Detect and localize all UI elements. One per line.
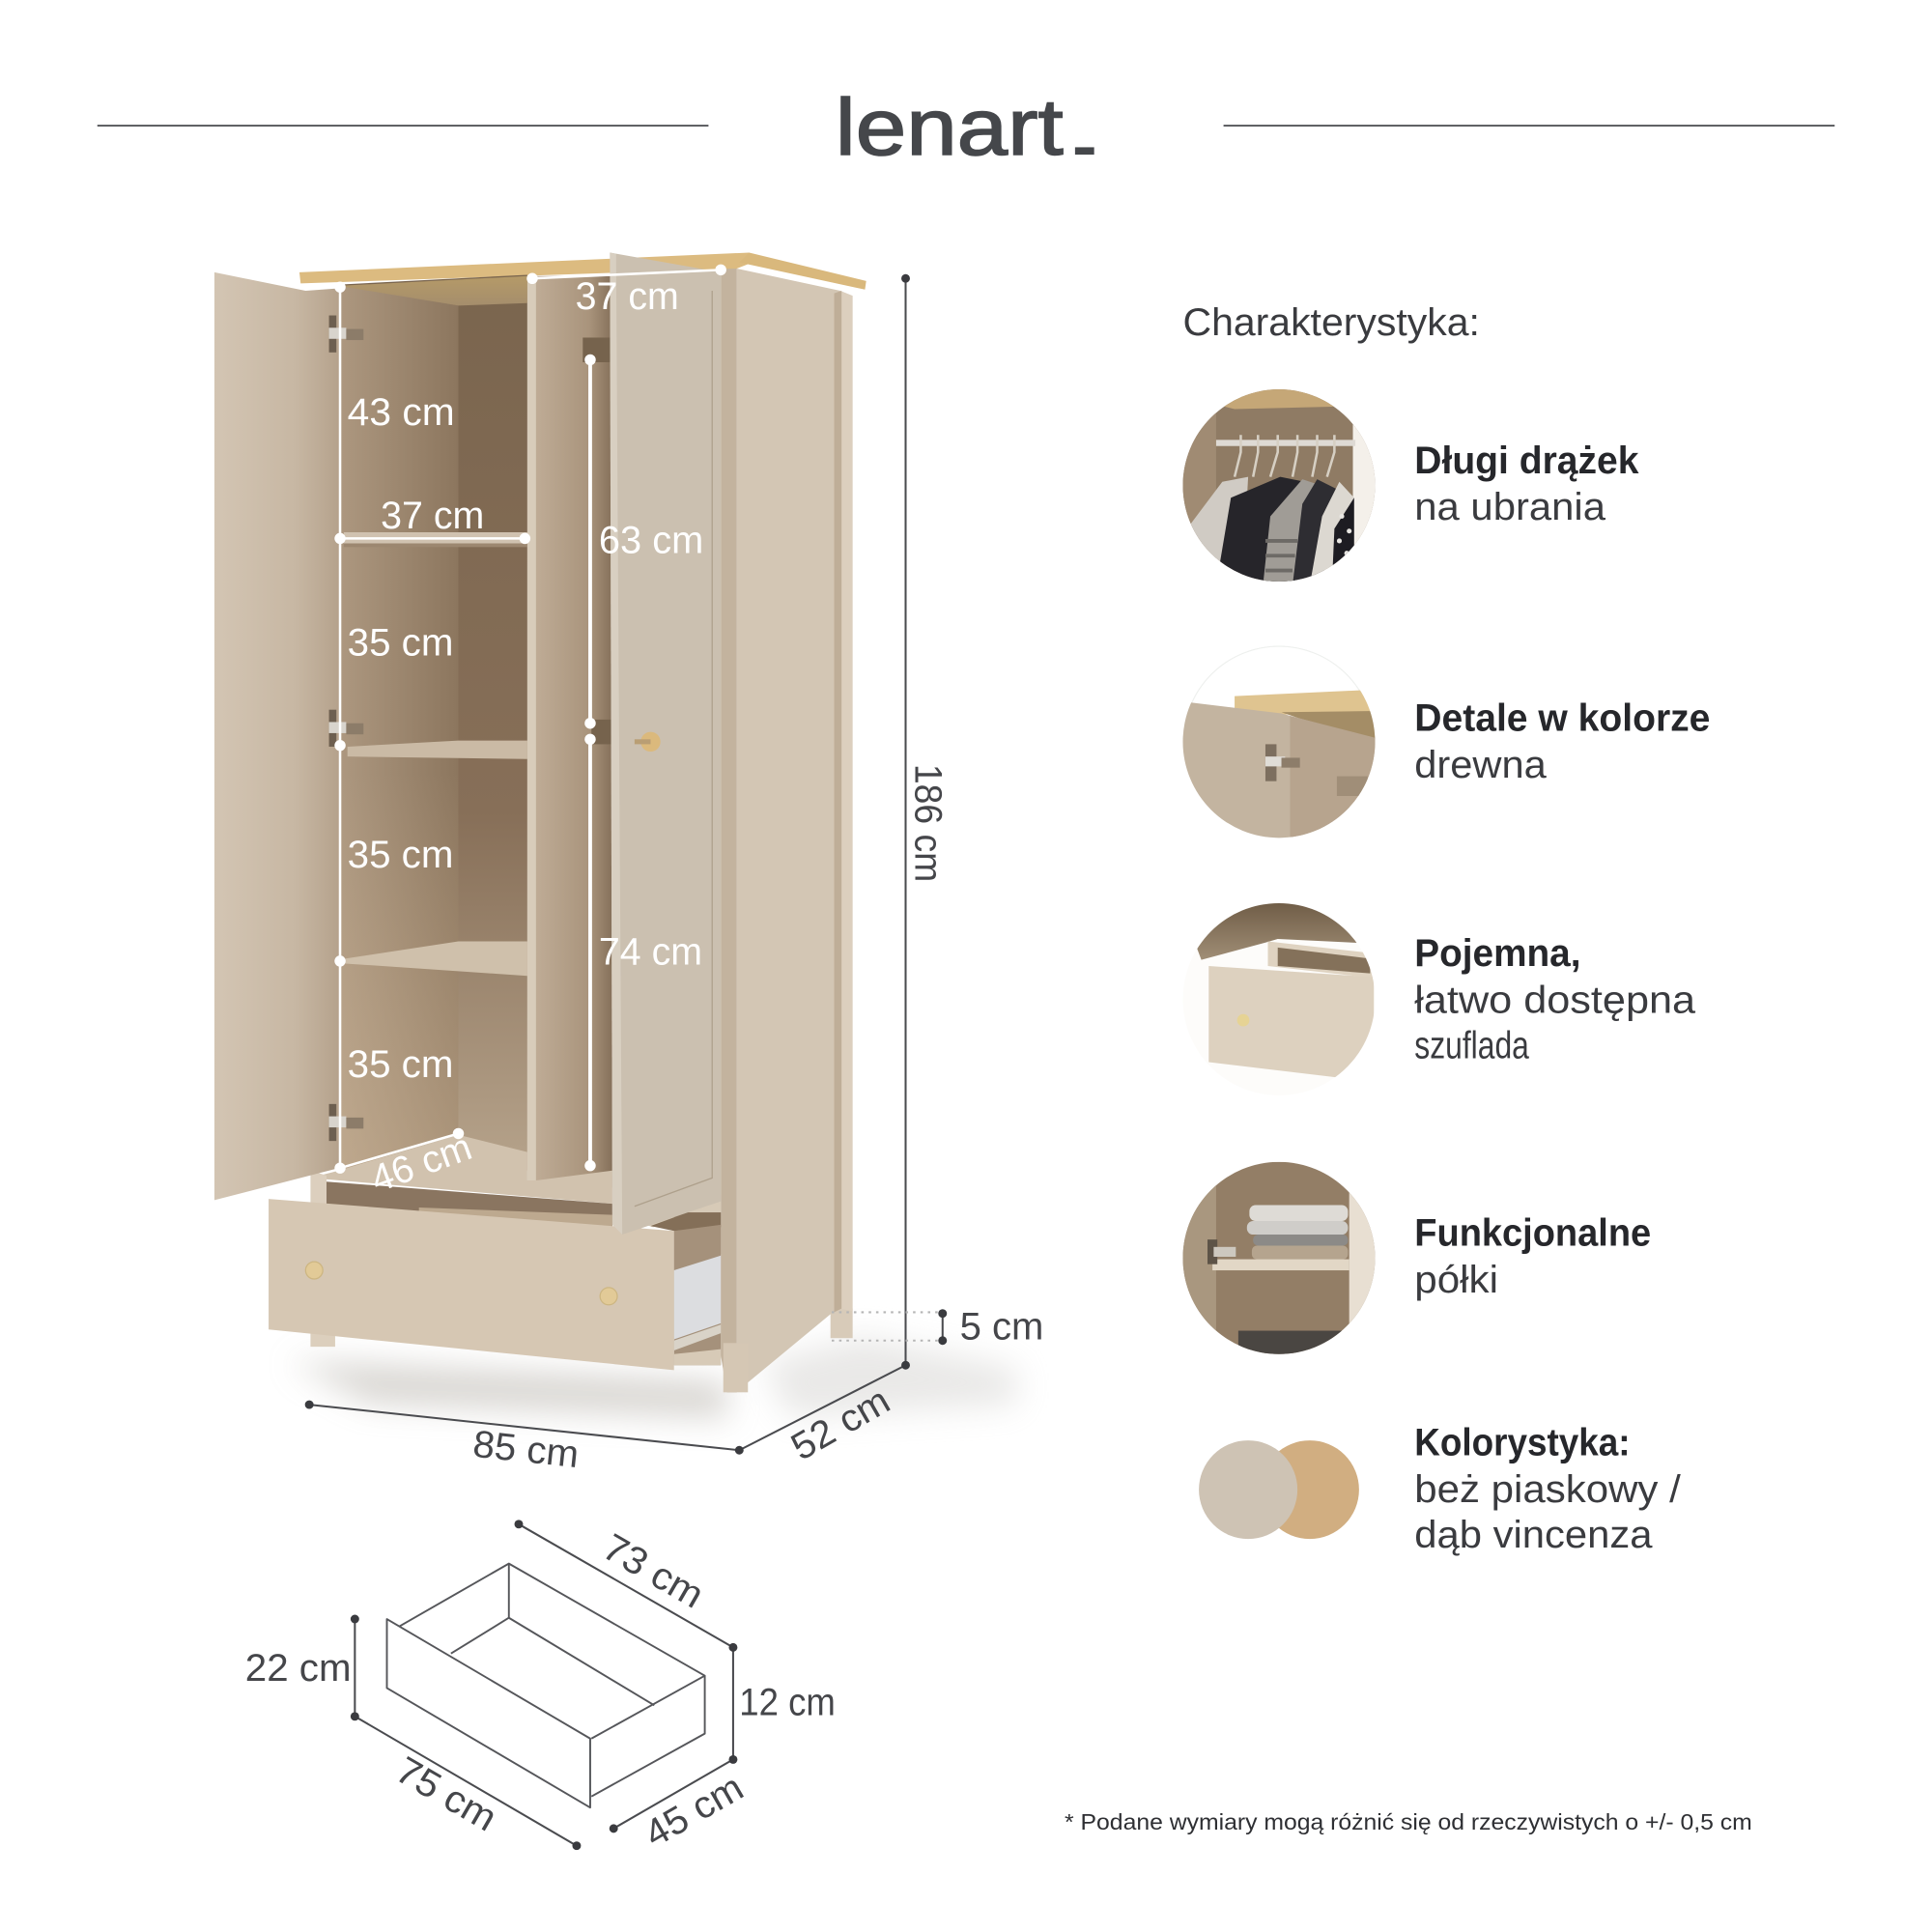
text: Kolorystyka: Kolorystyka: [1414,1421,1630,1463]
text: Długi drążek [1414,440,1639,528]
drawer knobs [305,1262,323,1279]
feature: long rail [1179,388,1639,585]
text: Pojemna: Pojemna, [1414,932,1580,975]
text: Detale w kolorze: drewna [1414,744,1547,786]
outer wardrobe dimensions: 5 cm [960,1305,1043,1348]
drawer diagram: 75 cm [388,1748,504,1839]
side panel and legs [310,269,853,1392]
header with logo [98,82,1834,172]
wardrobe with open doors and drawer [214,252,1016,1417]
text: Długi drążek: Długi drążek [1414,440,1639,482]
icon: clothes on rail [1179,388,1377,585]
divider and right compartment [527,276,612,1188]
door knob [640,732,661,752]
interior white dimensions: 37 cm [576,275,679,318]
text: Pojemna: łatwo dostępna [1414,979,1695,1021]
text: Długi drążek: na ubrania [1414,486,1605,528]
drawer diagram: 12 cm [739,1682,836,1724]
drawer diagram [245,1520,836,1856]
shelves [344,532,527,976]
drawer outline [387,1564,705,1807]
interior white dimensions: 74 cm [599,931,702,974]
oak worktop [299,252,867,290]
outer wardrobe dimensions: 52 cm [784,1379,897,1469]
text: Pojemna: szuflada [1414,1025,1529,1067]
icon: folded clothes on shelf [1179,1162,1378,1359]
interior white dimensions: 63 cm [599,520,703,562]
text: Kolorystyka [1414,1421,1681,1556]
left door [214,272,339,1200]
text: Kolorystyka: beż piaskowy / [1414,1468,1681,1511]
text: Detale w kolorze: Detale w kolorze [1414,696,1710,739]
cabinet floor and opening above drawer [310,1135,612,1233]
drawer dimension lines [355,1524,733,1846]
text: Funkcjonalne [1414,1212,1651,1301]
drawer diagram: 22 cm [245,1647,352,1690]
icon: drawer [1197,903,1374,1078]
left compartment interior [339,274,527,1171]
interior white dimensions: 43 cm [348,391,455,434]
floor shadow [290,1337,1016,1417]
outer wardrobe dimensions [305,274,1043,1476]
feature: colours [1199,1421,1681,1556]
interior white dimensions: 37 cm [381,495,484,537]
interior white dimensions: 35 cm [348,1043,453,1086]
icon: worktop and hinge [1179,645,1378,842]
icon: colour swatches [1199,1440,1359,1539]
characteristics heading: Charakterystyka: [1182,301,1480,344]
drawer diagram: 45 cm [638,1766,751,1856]
interior white dimensions: 46 cm [365,1125,477,1201]
feature: drawer [1179,900,1695,1097]
text: Pojemna [1414,932,1695,1067]
hinges [329,316,363,1141]
text: Funkcjonalne: półki [1414,1259,1498,1301]
right door [610,252,721,1235]
footnote: * Podane wymiary mogą różnić się od rzeczywistych o +/- 0,5 cm [1065,1809,1752,1834]
interior white dimensions: 35 cm [348,622,453,665]
text: Detale w kolorze [1414,696,1710,786]
outer wardrobe dimensions: 85 cm [471,1423,581,1476]
interior white dimensions [334,265,726,1201]
interior white dimensions: 35 cm [348,834,453,876]
feature: wood details [1179,645,1710,842]
text: Funkcjonalne: Funkcjonalne [1414,1212,1651,1255]
open drawer [269,1195,721,1370]
text: Kolorystyka: dąb vincenza [1414,1514,1652,1556]
feature: shelves [1179,1162,1651,1359]
outer wardrobe dimensions: 186 cm [907,764,950,882]
logo: lenart: lenart [836,82,1064,172]
drawer diagram: 73 cm [596,1525,711,1617]
